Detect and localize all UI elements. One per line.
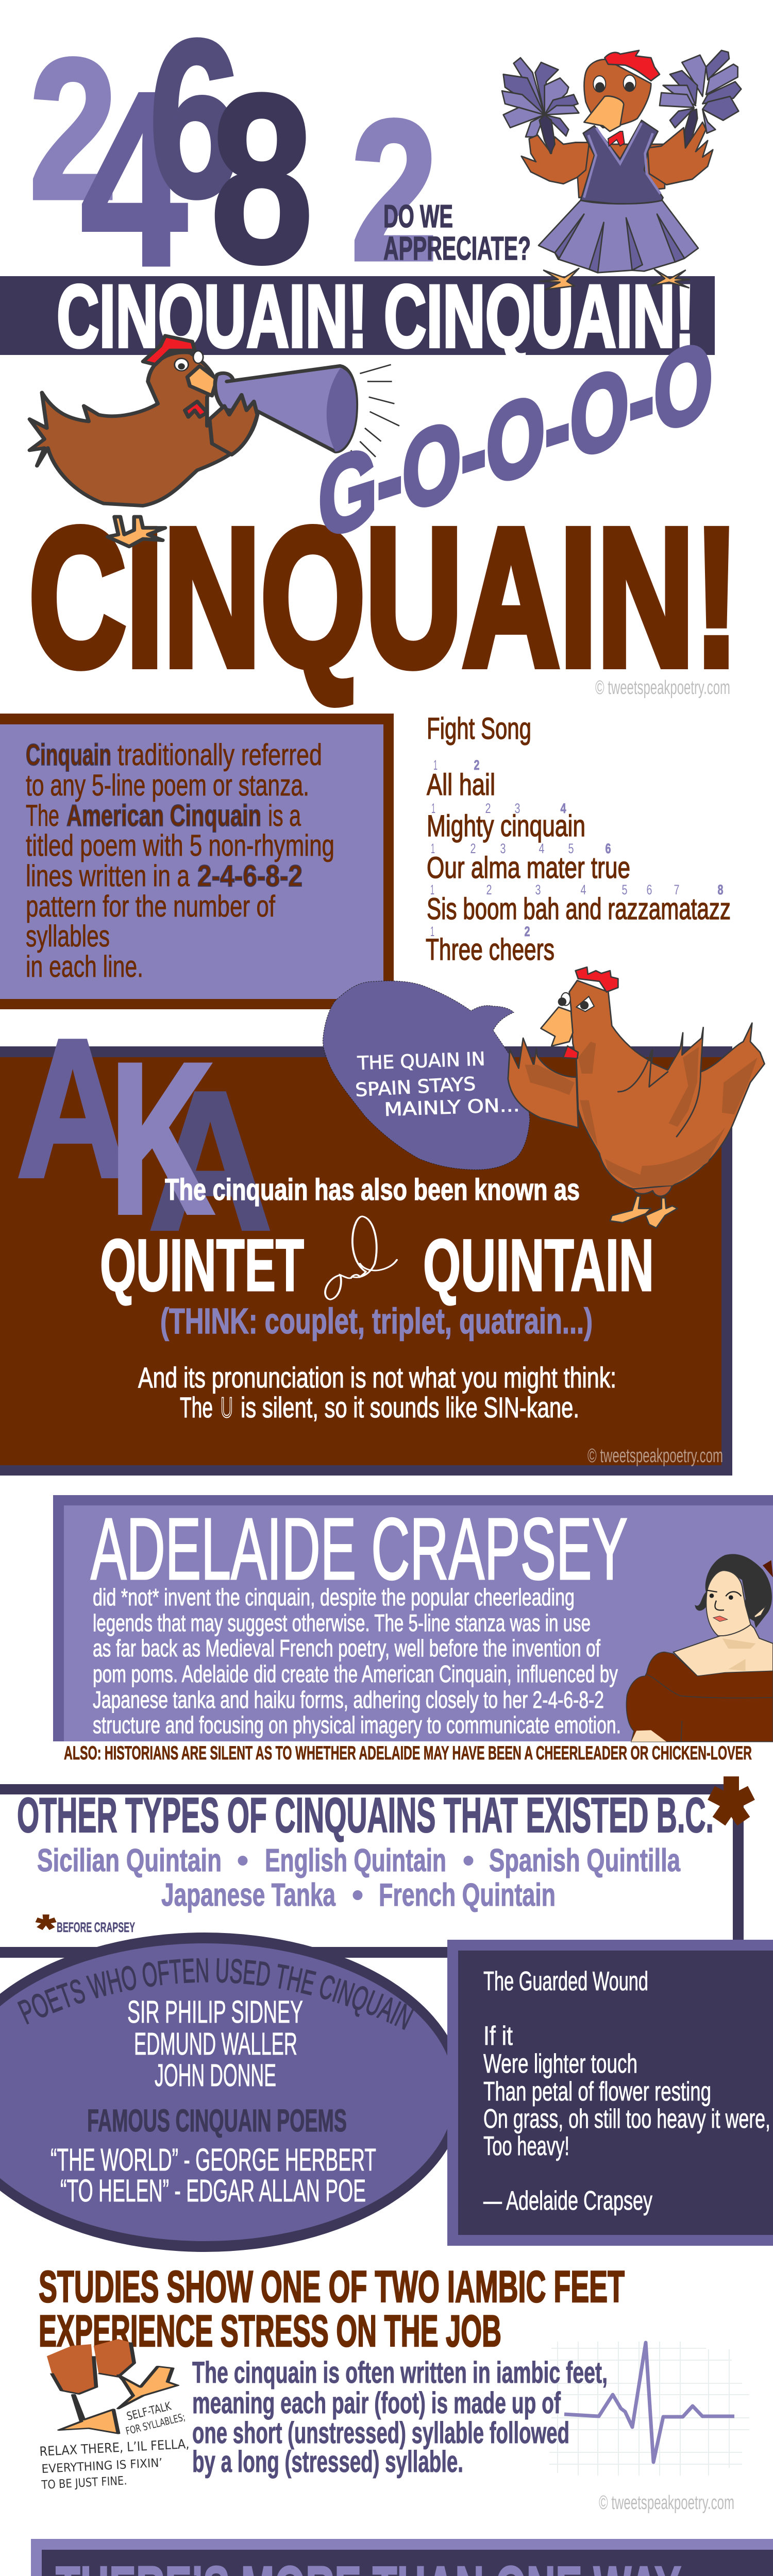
list of other cinquain types: French Quintain bbox=[379, 1877, 556, 1913]
body text bbox=[93, 1584, 621, 1738]
panel: cinquain definition: 2-4-6-8-2 bbox=[197, 859, 303, 893]
number 2 with question: APPRECIATE? bbox=[383, 230, 531, 267]
fight song poem with syllable counts: 1 bbox=[430, 882, 434, 897]
chicken legs illustration bbox=[47, 2339, 177, 2433]
heading: studies show bbox=[39, 2262, 625, 2356]
footnote: before Crapsey: BEFORE CRAPSEY bbox=[57, 1920, 135, 1935]
handwritten note: self-talk: FOR SYLLABLES; bbox=[124, 2411, 187, 2437]
panel: The Guarded Wound poem: Too heavy! bbox=[483, 2131, 569, 2161]
body text: as far back as Medieval French poetry, well before the invention of bbox=[93, 1635, 600, 1662]
panel: also known as: QUINTAIN bbox=[423, 1225, 654, 1307]
numbers 2 4 6 8: 8 bbox=[210, 44, 313, 313]
script word: and: and bbox=[326, 1282, 328, 1283]
iambic feet explanation: meaning each pair (foot) is made up of bbox=[192, 2386, 561, 2420]
fight song poem with syllable counts: 4 bbox=[580, 882, 586, 897]
panel: cinquain definition: lines written in a bbox=[26, 859, 190, 893]
numbers 2 4 6 8: 4 bbox=[80, 41, 189, 318]
panel: cinquain definition: to any 5-line poem or stanza. bbox=[26, 769, 309, 802]
cheerleader hen bbox=[502, 50, 741, 290]
panel: cinquain definition: syllables bbox=[26, 920, 110, 953]
fight song poem with syllable counts: 5 bbox=[568, 841, 574, 856]
panel: also known as: The bbox=[180, 1391, 213, 1423]
fight song poem with syllable counts: Mighty cinquain bbox=[427, 809, 585, 843]
iambic feet explanation: by a long (stressed) syllable. bbox=[192, 2445, 463, 2479]
portrait: Adelaide bbox=[626, 1554, 773, 1742]
list of other cinquain types: Japanese Tanka bbox=[161, 1877, 335, 1913]
list of other cinquain types: Spanish Quintilla bbox=[489, 1843, 680, 1878]
fight song poem with syllable counts: Fight Song bbox=[427, 712, 531, 745]
body text: Japanese tanka and haiku forms, adhering closely to her 2-4-6-8-2 bbox=[93, 1686, 604, 1713]
famous poems bbox=[51, 2103, 376, 2208]
fight song poem with syllable counts: Our alma mater true bbox=[427, 851, 630, 885]
speech bubble: THE QUAIN IN bbox=[357, 1048, 485, 1074]
panel: cinquain definition: Cinquain bbox=[26, 738, 111, 772]
fight song poem with syllable counts: 2 bbox=[470, 841, 476, 856]
fight song poem with syllable counts: 6 bbox=[646, 882, 652, 897]
panel: The Guarded Wound poem bbox=[447, 1940, 773, 2246]
fight song poem with syllable counts: 4 bbox=[561, 801, 566, 816]
panel: The Guarded Wound poem: Were lighter touch bbox=[483, 2049, 637, 2079]
footnote: before Crapsey bbox=[36, 1907, 135, 1950]
handwritten note: self-talk: RELAX THERE, L’IL FELLA, bbox=[39, 2436, 190, 2459]
number 2 with question: 2 bbox=[350, 78, 438, 302]
famous poems: “TO HELEN” - EDGAR ALLAN POE bbox=[60, 2173, 366, 2208]
list of other cinquain types: • bbox=[463, 1843, 474, 1878]
chart: heartbeat line bbox=[549, 2342, 749, 2476]
letters AKA: A bbox=[16, 998, 129, 1218]
handwritten note: self-talk: SELF-TALK bbox=[125, 2400, 173, 2424]
numbers 2 4 6 8: 2 bbox=[29, 16, 117, 241]
fight song poem with syllable counts: 5 bbox=[621, 882, 628, 897]
panel: also known as bbox=[0, 998, 732, 1476]
poets list: JOHN DONNE bbox=[155, 2058, 276, 2093]
fight song poem with syllable counts bbox=[426, 712, 731, 967]
fight song poem with syllable counts: 1 bbox=[430, 924, 434, 939]
panel: The Guarded Wound poem: The Guarded Wound bbox=[483, 1967, 648, 1996]
iambic feet explanation bbox=[192, 2356, 608, 2479]
panel: The Guarded Wound poem: If it bbox=[483, 2021, 513, 2051]
number 2 with question bbox=[350, 78, 531, 302]
panel: cinquain definition: is a bbox=[268, 799, 301, 833]
letters AKA bbox=[16, 998, 272, 1270]
curved heading: POETS WHO OFTEN USED THE CINQUAIN bbox=[17, 1958, 414, 2030]
list of other cinquain types bbox=[37, 1843, 680, 1913]
famous poems: “THE WORLD” - GEORGE HERBERT bbox=[51, 2142, 376, 2177]
list of other cinquain types: Sicilian Quintain bbox=[37, 1843, 222, 1878]
panel: cinquain definition bbox=[0, 714, 394, 1009]
footnote: before Crapsey: * bbox=[36, 1907, 56, 1950]
panel: The Guarded Wound poem: — Adelaide Crapsey bbox=[483, 2186, 652, 2216]
fight song poem with syllable counts: 8 bbox=[717, 882, 724, 897]
megaphone hen bbox=[29, 336, 399, 547]
speech bubble: MAINLY ON... bbox=[384, 1095, 520, 1121]
panel: Adelaide Crapsey bbox=[53, 1495, 773, 1742]
speech bubble bbox=[323, 981, 530, 1170]
list of other cinquain types: English Quintain bbox=[265, 1843, 446, 1878]
number 2 with question: DO WE bbox=[383, 199, 453, 234]
fight song poem with syllable counts: 2 bbox=[525, 924, 530, 939]
letters AKA: K bbox=[110, 1019, 213, 1258]
script word: and bbox=[325, 1216, 397, 1299]
handwritten note: self-talk: TO BE JUST FINE. bbox=[41, 2474, 127, 2492]
panel: also known as: (THINK: couplet, triplet, quatrain...) bbox=[160, 1301, 593, 1341]
fight song poem with syllable counts: 3 bbox=[535, 882, 541, 897]
fight song poem with syllable counts: 1 bbox=[431, 841, 435, 856]
panel: poets ellipse bbox=[0, 1933, 447, 2252]
fight song poem with syllable counts: 3 bbox=[514, 801, 520, 816]
asterisk icon: brown bbox=[711, 1776, 751, 1821]
body text: did *not* invent the cinquain, despite the popular cheerleading bbox=[93, 1584, 575, 1611]
panel: cinquain definition: in each line. bbox=[26, 950, 143, 984]
fight song poem with syllable counts: 2 bbox=[474, 757, 479, 773]
fight song poem with syllable counts: 7 bbox=[674, 882, 679, 897]
list of other cinquain types: • bbox=[352, 1877, 363, 1913]
panel: also known as: QUINTET bbox=[100, 1225, 304, 1307]
handwritten note: self-talk: EVERYTHING IS FIXIN’ bbox=[41, 2456, 163, 2476]
panel: cinquain definition: The bbox=[26, 799, 59, 833]
panel: cinquain definition: American Cinquain bbox=[66, 799, 261, 833]
fight song poem with syllable counts: 1 bbox=[431, 801, 435, 816]
iambic feet explanation: one short (unstressed) syllable followed bbox=[192, 2416, 569, 2450]
panel: cinquain definition: pattern for the number of bbox=[26, 890, 276, 923]
panel: cinquain definition: traditionally referred bbox=[117, 738, 322, 772]
poets list bbox=[127, 1994, 303, 2093]
panel: also known as: The cinquain has also been known as bbox=[165, 1173, 580, 1207]
poets list: EDMUND WALLER bbox=[134, 2026, 297, 2061]
fight song poem with syllable counts: 2 bbox=[485, 801, 491, 816]
panel: also known as: U bbox=[221, 1391, 233, 1423]
letters AKA: A bbox=[148, 1050, 272, 1270]
list of other cinquain types: • bbox=[237, 1843, 248, 1878]
panel: variations bbox=[31, 2539, 773, 2576]
hen in profile bbox=[508, 967, 764, 1228]
handwritten note: self-talk bbox=[39, 2400, 190, 2492]
poets list: SIR PHILIP SIDNEY bbox=[127, 1994, 303, 2029]
numbers 2 4 6 8 bbox=[29, 0, 313, 318]
famous poems: FAMOUS CINQUAIN POEMS bbox=[87, 2103, 347, 2138]
panel: also known as: And its pronunciation is not what you might think: bbox=[138, 1361, 616, 1394]
body text: legends that may suggest otherwise. The 5-line stanza was in use bbox=[93, 1609, 591, 1636]
speech bubble: SPAIN STAYS bbox=[355, 1074, 476, 1101]
fight song poem with syllable counts: 6 bbox=[605, 841, 611, 856]
panel: cinquain definition: titled poem with 5 non-rhyming bbox=[26, 829, 334, 862]
fight song poem with syllable counts: All hail bbox=[427, 768, 495, 802]
fight song poem with syllable counts: 3 bbox=[500, 841, 506, 856]
panel: also known as: is silent, so it sounds like SIN-kane. bbox=[241, 1391, 579, 1423]
fight song poem with syllable counts: 2 bbox=[486, 882, 492, 897]
fight song poem with syllable counts: 4 bbox=[539, 841, 544, 856]
fight song poem with syllable counts: 1 bbox=[433, 757, 438, 773]
fight song poem with syllable counts: Three cheers bbox=[426, 933, 554, 967]
